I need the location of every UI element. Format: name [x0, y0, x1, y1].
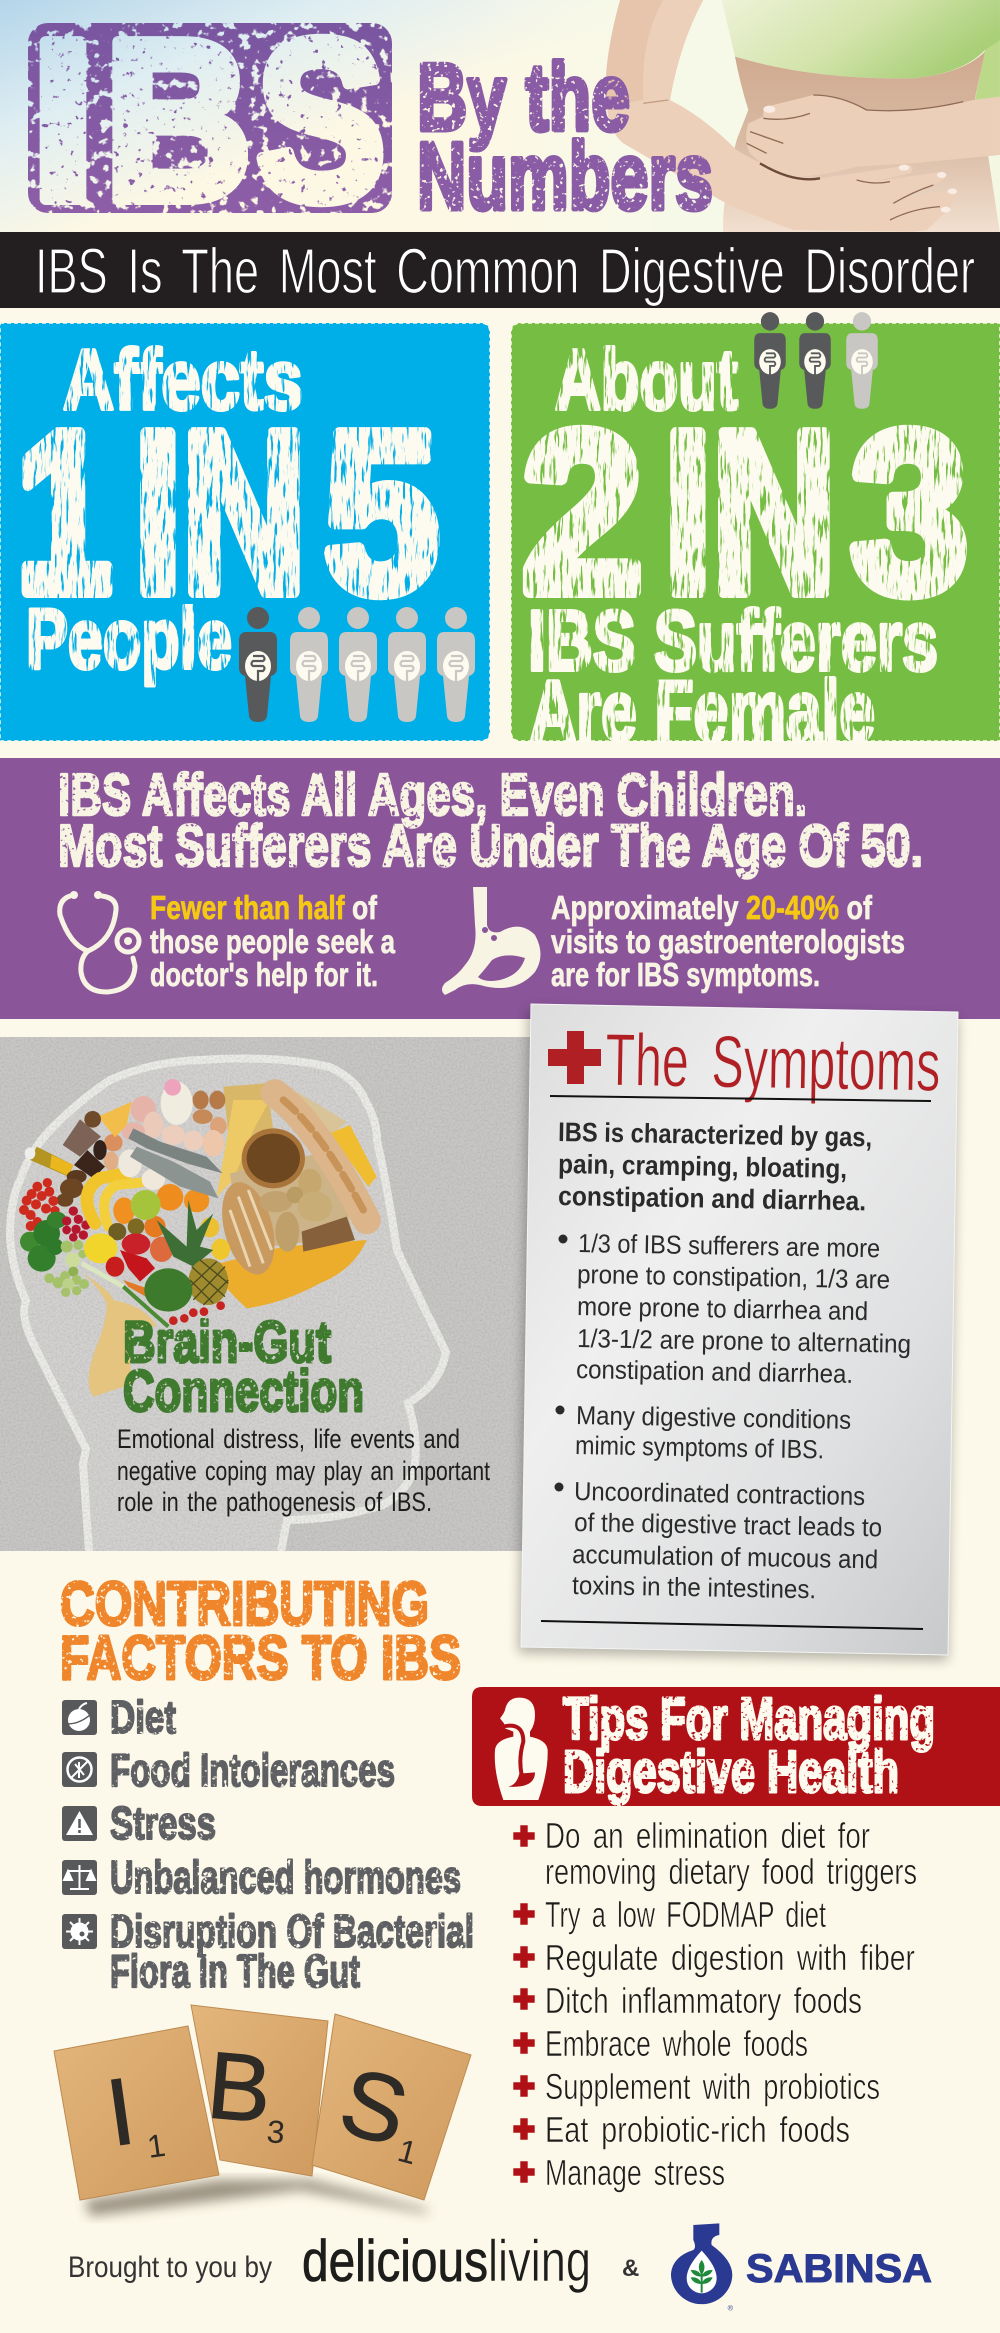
- chalk head outline: [10, 1059, 446, 1551]
- list: symptom bullets: Many digestive conditions: [576, 1400, 851, 1435]
- tile I: 1: [145, 2127, 168, 2165]
- heading: brain-gut connection: Connection: [123, 1359, 364, 1424]
- logo: Sabinsa: [671, 2223, 932, 2313]
- photo: IBS letter tiles: [54, 2005, 471, 2216]
- factor: diet: [62, 1691, 176, 1743]
- title: By the Numbers: [417, 44, 713, 230]
- icon: digestive tract silhouette: [495, 1698, 548, 1800]
- title: By the Numbers: Numbers: [417, 123, 713, 230]
- icon: Sabinsa emblem: [671, 2223, 734, 2313]
- tile S: [312, 2014, 471, 2200]
- heading: Affects 1 in 5 people: 5: [324, 386, 439, 640]
- list: tips: Do an elimination diet for: [545, 1815, 870, 1856]
- text: fewer than half: doctor's help for it.: [150, 956, 378, 993]
- tile B: 3: [265, 2113, 286, 2151]
- panel: 2 in 3: [511, 312, 1000, 759]
- text: symptoms summary: [558, 1117, 872, 1216]
- list: tips: Supplement with probiotics: [545, 2066, 880, 2107]
- factor: unbalanced hormones: Unbalanced hormones: [110, 1851, 461, 1903]
- text: brain-gut description: role in the pathogenesis of IBS.: [117, 1487, 432, 1517]
- illustration: food in shape of brain: [19, 1079, 377, 1397]
- tile S: S: [330, 2048, 418, 2167]
- heading: About 2 in 3 IBS sufferers are female: 2: [522, 386, 643, 640]
- text: symptoms summary: pain, cramping, bloating,: [558, 1149, 847, 1184]
- list: symptom bullets: constipation and diarrhea.: [576, 1354, 853, 1389]
- list: tips: Ditch inflammatory foods: [545, 1980, 862, 2021]
- panel: ages: [0, 758, 1000, 1019]
- text: fewer than half: Fewer than half of: [150, 889, 378, 926]
- panel: 1 in 5: [0, 323, 490, 741]
- factor: unbalanced hormones: [62, 1851, 461, 1903]
- heading: brain-gut connection: [123, 1310, 364, 1424]
- icons: three people, two highlighted: [754, 312, 878, 409]
- heading: Affects 1 in 5 people: Affects: [63, 333, 303, 428]
- header background: [0, 0, 1000, 232]
- list: symptom bullets: 1/3 of IBS sufferers are more: [578, 1228, 880, 1263]
- heading: About 2 in 3 IBS sufferers are female: About: [555, 333, 738, 428]
- text: brain-gut description: Emotional distress, life events and: [117, 1424, 460, 1454]
- list: symptom bullets: of the digestive tract leads to: [574, 1507, 882, 1542]
- logo: delicious living: delicious: [302, 2229, 488, 2294]
- heading: About 2 in 3 IBS sufferers are female: [522, 333, 968, 759]
- text: symptoms summary: constipation and diarrhea.: [558, 1181, 866, 1216]
- list: symptom bullets: 1/3-1/2 are prone to alternating: [577, 1323, 911, 1359]
- list: tips: Try a low FODMAP diet: [545, 1894, 826, 1935]
- heading: all ages: [58, 762, 923, 879]
- title: By the Numbers: By the: [417, 44, 630, 151]
- heading: About 2 in 3 IBS sufferers are female: IN: [664, 386, 836, 640]
- heading: Affects 1 in 5 people: People: [26, 592, 232, 687]
- list: symptom bullets: [554, 1228, 911, 1604]
- icon: stomach: [442, 887, 540, 995]
- list: symptom bullets: more prone to diarrhea and: [577, 1291, 868, 1326]
- text: brain-gut description: negative coping may play an important: [117, 1456, 490, 1486]
- list: symptom bullets: Uncoordinated contractions: [574, 1476, 865, 1511]
- factor: bacterial flora disruption: [62, 1905, 474, 1997]
- list: symptom bullets: toxins in the intestines.: [572, 1570, 816, 1604]
- list: contributing factors: [62, 1691, 474, 1997]
- list: tips: Embrace whole foods: [545, 2023, 808, 2064]
- text: 20-40 percent: are for IBS symptoms.: [551, 956, 820, 993]
- text: fewer than half: [150, 889, 395, 993]
- footer: sponsors: [68, 2223, 932, 2313]
- tile S: 1: [394, 2132, 421, 2171]
- panel: brain-gut connection: [0, 1037, 535, 1551]
- title: IBS: I: [30, 0, 96, 248]
- tile I: [54, 2026, 219, 2200]
- heading: Affects 1 in 5 people: [16, 333, 439, 687]
- factor: bacterial flora disruption: Disruption Of Bacterial: [110, 1905, 474, 1957]
- tile I: I: [100, 2058, 141, 2167]
- text: brought to you by: Brought to you by: [68, 2251, 272, 2284]
- heading: Affects 1 in 5 people: IN: [134, 386, 306, 640]
- factor: bacterial flora disruption: Flora In The Gut: [110, 1945, 360, 1997]
- title: IBS: B: [104, 0, 252, 248]
- title: IBS: S: [256, 0, 386, 248]
- list: tips: Eat probiotic-rich foods: [545, 2109, 850, 2150]
- list: symptom bullets: mimic symptoms of IBS.: [575, 1430, 824, 1464]
- text: 20-40 percent: visits to gastroenterologists: [551, 923, 905, 960]
- list: tips: [513, 1815, 917, 2193]
- text: 20-40 percent: Approximately 20-40% of: [551, 889, 873, 926]
- tile B: [191, 2005, 328, 2176]
- panel: the symptoms: [518, 1004, 958, 1661]
- heading: contributing factors: CONTRIBUTING: [60, 1570, 429, 1639]
- heading: Affects 1 in 5 people: 1: [16, 386, 112, 640]
- text: symptoms summary: IBS is characterized by gas,: [558, 1117, 872, 1152]
- photo: hands on stomach: [606, 0, 1000, 233]
- icon: red cross: [548, 1031, 601, 1084]
- heading: brain-gut connection: Brain-Gut: [123, 1310, 331, 1375]
- heading: contributing factors: [60, 1570, 461, 1693]
- ampersand: &: [622, 2255, 639, 2282]
- factor: stress: Stress: [110, 1797, 216, 1849]
- icon: Sabinsa emblem: ®: [728, 2304, 734, 2313]
- icons: five people, one highlighted: [239, 607, 475, 722]
- heading: tips for managing digestive health: [563, 1686, 935, 1805]
- text: 20-40 percent: [551, 889, 905, 993]
- logo: Sabinsa: SABINSA: [746, 2247, 932, 2291]
- list: symptom bullets: accumulation of mucous and: [572, 1539, 878, 1574]
- text: fewer than half: those people seek a: [150, 923, 395, 960]
- text: brain-gut description: [117, 1424, 490, 1517]
- heading: contributing factors: FACTORS TO IBS: [60, 1624, 461, 1693]
- heading: About 2 in 3 IBS sufferers are female: 3: [851, 386, 968, 640]
- logo: delicious living: living: [488, 2229, 591, 2294]
- factor: food intolerances: [62, 1744, 395, 1796]
- panel: tips: [472, 1686, 1000, 1806]
- factor: stress: [62, 1797, 216, 1849]
- factor: diet: Diet: [110, 1691, 176, 1743]
- tile B: B: [203, 2032, 276, 2143]
- icon: stethoscope: [60, 891, 139, 992]
- title: IBS: [28, 0, 392, 248]
- list: tips: Manage stress: [545, 2152, 725, 2193]
- list: symptom bullets: prone to constipation, 1/3 are: [577, 1259, 890, 1294]
- factor: food intolerances: Food Intolerances: [110, 1744, 395, 1796]
- heading: About 2 in 3 IBS sufferers are female: Are Female: [530, 664, 875, 759]
